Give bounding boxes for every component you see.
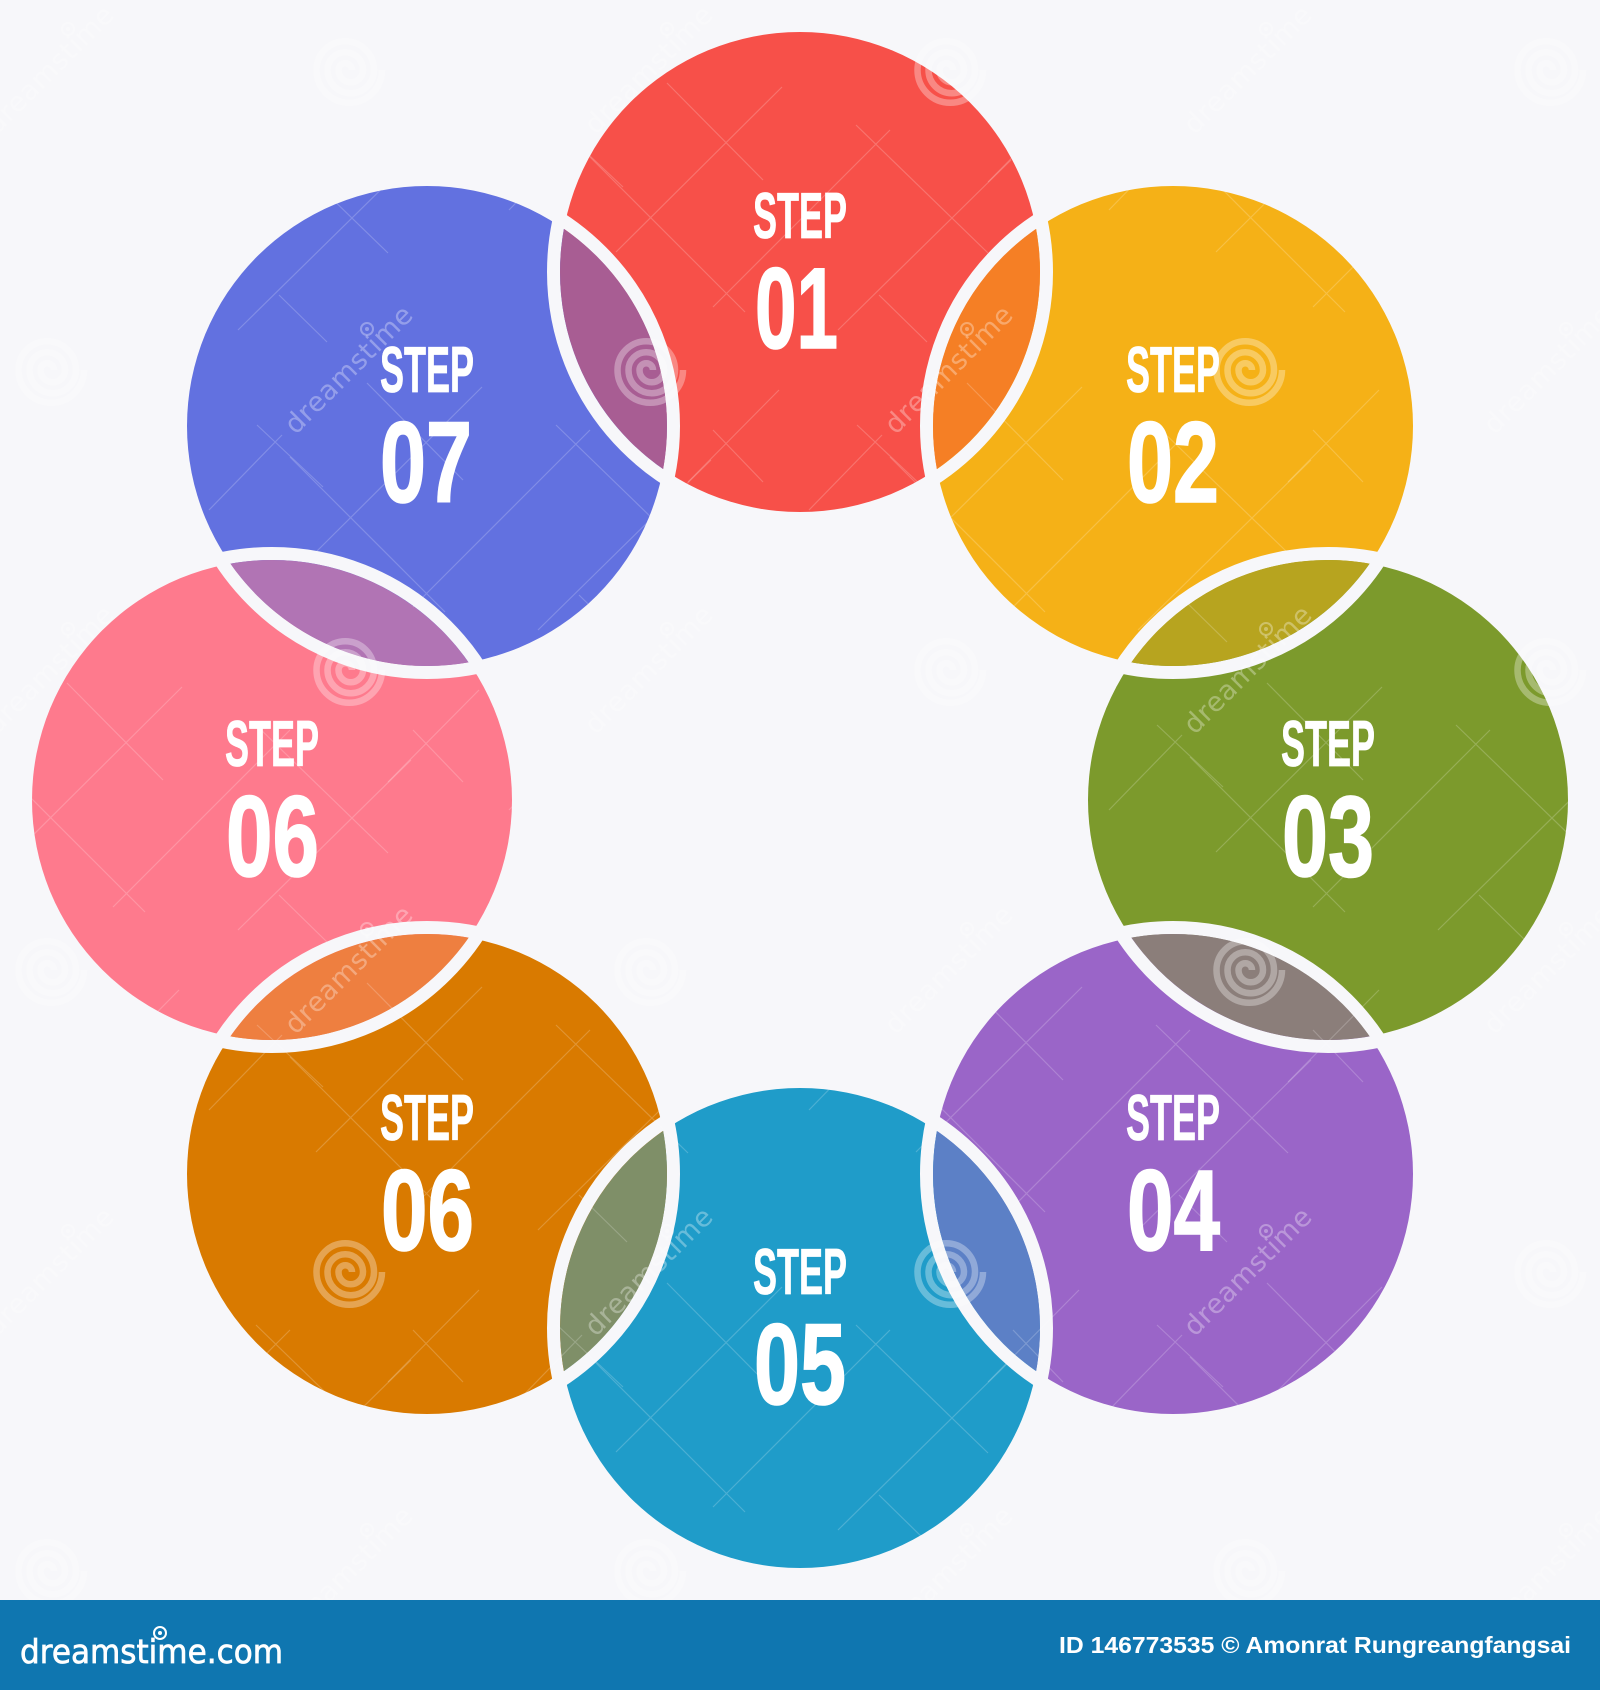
number: 03: 03 — [1282, 773, 1374, 901]
label: step 03: STEP — [1281, 707, 1375, 780]
label: orange step 06: STEP — [380, 1081, 474, 1154]
step 06 circle, pink — [32, 560, 512, 1040]
watermark: diagonal brand text: dreamstime — [279, 900, 419, 1040]
step 06 circle, orange — [187, 934, 667, 1414]
label: step 01: STEP — [753, 179, 847, 252]
watermark: diagonal brand text: dreamstime — [879, 900, 1019, 1040]
watermark: diagonal brand text: dreamstime — [879, 300, 1019, 440]
overlap lens: 02 and 03 — [1118, 547, 1384, 679]
disc: pink step 06 — [32, 560, 512, 1040]
label: step 02: STEP — [1126, 333, 1220, 406]
step 01 circle — [560, 32, 1040, 512]
disc: step 03 — [1088, 560, 1568, 1040]
step 04 circle — [933, 934, 1413, 1414]
watermark: diagonal brand text: dreamstime — [579, 600, 719, 740]
disc: step 05 — [560, 1088, 1040, 1568]
watermark: diagonal brand text: dreamstime — [1178, 600, 1318, 740]
label: step 07: STEP — [380, 333, 474, 406]
number: 02: 02 — [1127, 399, 1219, 527]
disc: step 02 — [933, 186, 1413, 666]
disc: step 07 — [187, 186, 667, 666]
label: pink step 06: STEP — [225, 707, 319, 780]
overlap lens: orange 06 and pink 06 — [216, 921, 482, 1053]
step 07 circle — [187, 186, 667, 666]
disc: step 01 — [560, 32, 1040, 512]
step 03 circle — [1088, 560, 1568, 1040]
overlap lens: 05 and orange 06 — [547, 1117, 680, 1385]
footer image credit: ID 146773535 © Amonrat Rungreangfangsai — [1059, 1632, 1571, 1658]
number: 01: 01 — [755, 245, 838, 373]
watermark: diagonal brand text: dreamstime — [1178, 0, 1318, 140]
overlap lens: 01 and 02 — [920, 215, 1053, 483]
watermark: diagonal brand text: dreamstime — [879, 1501, 1019, 1641]
overlap lens: pink 06 and 07 — [216, 547, 482, 679]
overlap lens: 04 and 05 — [920, 1117, 1053, 1385]
label: step 05: STEP — [753, 1235, 847, 1308]
watermark: diagonal brand text: dreamstime — [279, 300, 419, 440]
disc: step 04 — [933, 934, 1413, 1414]
number: orange 06: 06 — [381, 1147, 474, 1275]
watermark: diagonal brand text: dreamstime — [579, 1202, 719, 1342]
watermark: diagonal brand text: dreamstime — [579, 0, 719, 140]
overlap lens: 03 and 04 — [1118, 921, 1384, 1053]
footer bar — [0, 1600, 1600, 1690]
number: 04: 04 — [1127, 1147, 1220, 1275]
number: 05: 05 — [754, 1301, 846, 1429]
watermark: diagonal brand text: dreamstime — [1178, 1202, 1318, 1342]
footer logo: dreamstime.com — [20, 1632, 283, 1671]
number: 07: 07 — [380, 399, 472, 527]
step 05 circle — [560, 1088, 1040, 1568]
watermark: diagonal brand text: dreamstime — [279, 1501, 419, 1641]
number: pink 06: 06 — [226, 773, 319, 901]
disc: orange step 06 — [187, 934, 667, 1414]
step 02 circle — [933, 186, 1413, 666]
label: step 04: STEP — [1126, 1081, 1220, 1154]
overlap lens: 07 and 01 — [547, 215, 680, 483]
